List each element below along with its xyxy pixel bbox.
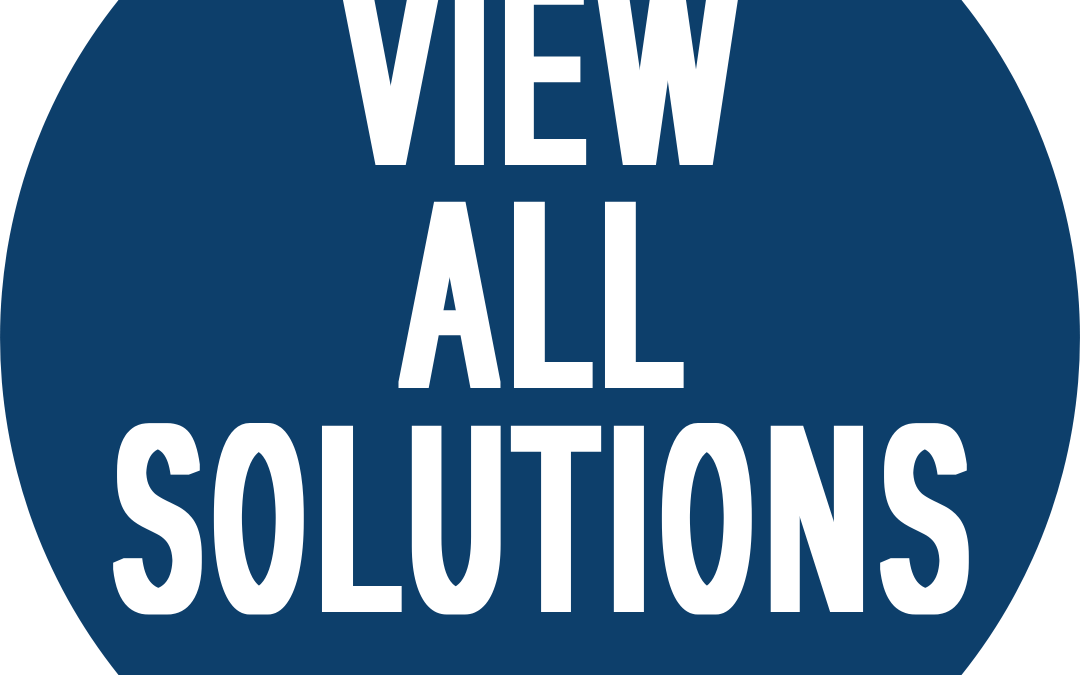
heading: ALL: A [407, 148, 492, 441]
heading: SOLUTIONS [116, 371, 965, 666]
heading: SOLUTIONS: T [517, 371, 595, 665]
heading: SOLUTIONS: S [116, 373, 198, 665]
heading: SOLUTIONS: L [320, 372, 397, 665]
heading: ALL [407, 148, 679, 441]
heading: VIEW [348, 0, 732, 219]
heading: ALL: L [603, 150, 679, 441]
heading: SOLUTIONS: O [218, 373, 300, 665]
heading: SOLUTIONS: N [769, 373, 865, 666]
heading: SOLUTIONS: U [411, 373, 501, 665]
heading: ALL: L [512, 150, 588, 441]
heading: SOLUTIONS: O [666, 373, 748, 665]
heading: SOLUTIONS: I [611, 372, 647, 665]
heading: SOLUTIONS: S [884, 373, 965, 665]
